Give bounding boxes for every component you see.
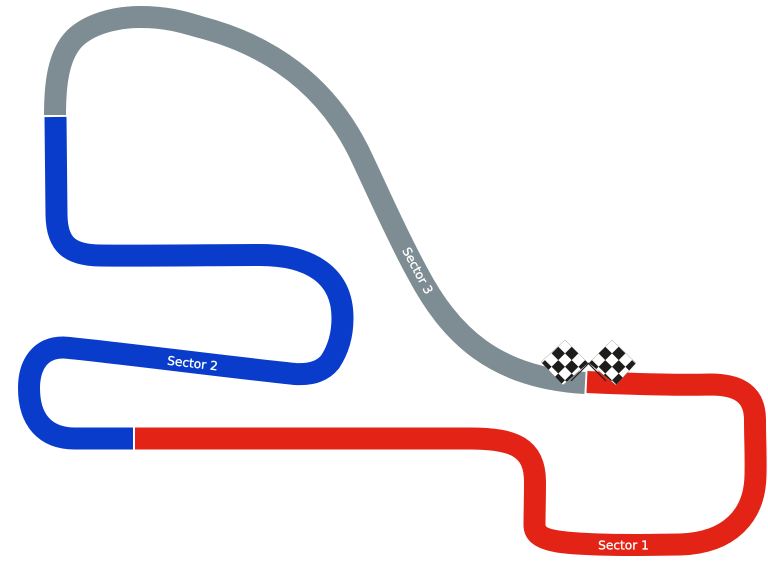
label: sector 3: Sector 3 [399,245,436,296]
icon: crossed checkered flags [541,340,636,386]
label: sector 1: Sector 1 [598,538,649,552]
label: sector 2: Sector 2 [167,354,219,373]
sector 1: red track [135,382,756,552]
sector 2: blue track [29,117,342,438]
